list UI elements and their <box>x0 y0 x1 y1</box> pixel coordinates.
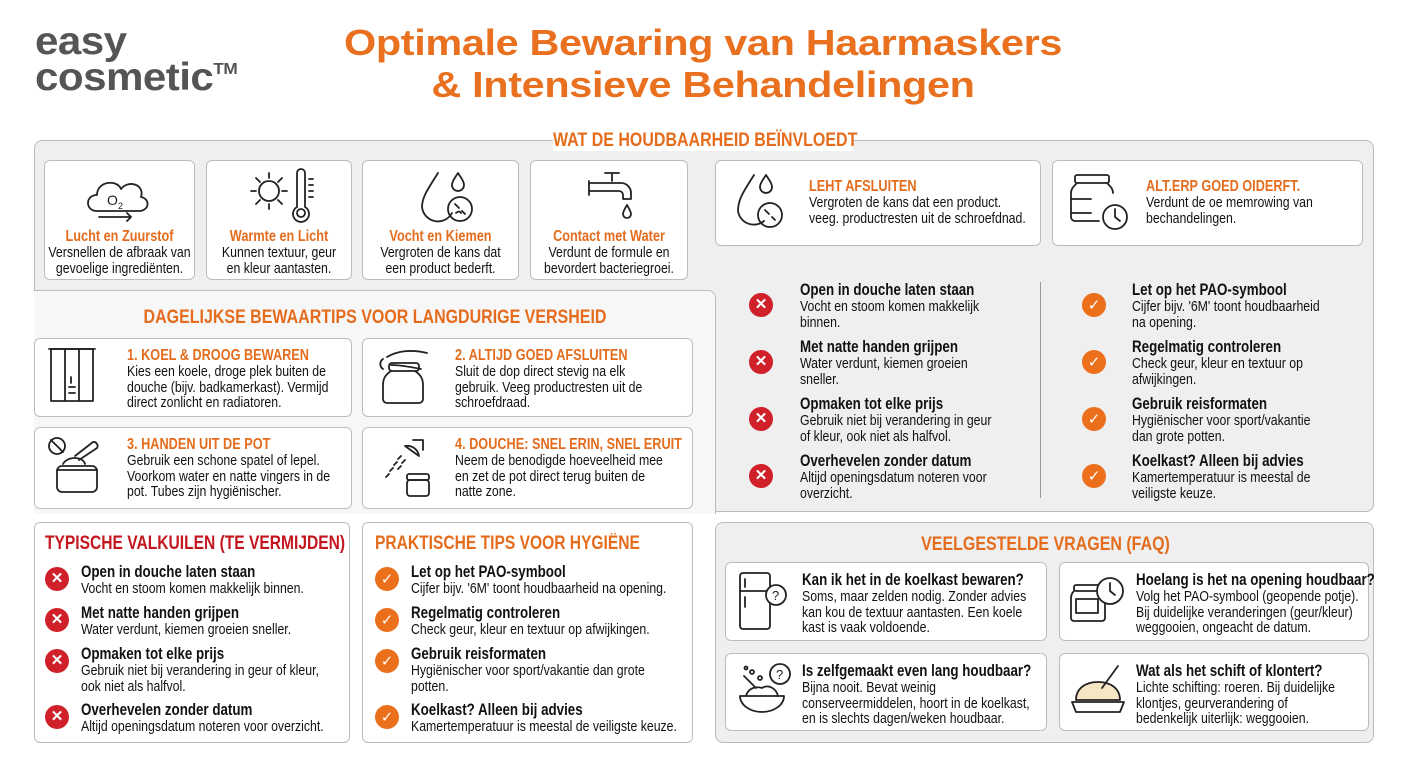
heading: valkuilen: TYPISCHE VALKUILEN (TE VERMIJDEN) <box>45 533 345 554</box>
card: schift: Wat als het schift of klontert? <box>1136 662 1322 680</box>
list: right-side tips: Kamertemperatuur is meestal de <box>1132 469 1310 486</box>
heading: wat de houdbaarheid: WAT DE HOUDBAARHEID BEÏNVLOEDT <box>553 129 857 151</box>
card: schift: klontjes, geurverandering of <box>1136 695 1288 712</box>
card: lucht en zuurstof: Lucht en Zuurstof <box>65 228 174 245</box>
icon: jar spatula <box>48 437 98 493</box>
card: lucht en zuurstof <box>44 160 195 280</box>
card: contact met water <box>530 160 688 280</box>
panel: typische valkuilen: ✕ <box>51 611 63 628</box>
card: zelfgemaakt <box>725 653 1047 731</box>
heading: dagelijkse: DAGELIJKSE BEWAARTIPS VOOR LANGDURIGE VERSHEID <box>144 306 606 328</box>
list: right-side valkuilen: ✕ <box>755 296 767 313</box>
list: right-side valkuilen: ✕ <box>755 467 767 484</box>
card: douche <box>362 427 693 509</box>
card: koelkast: kan kou de textuur aantasten. Een koele <box>802 604 1022 621</box>
list: right-side tips: dan grote potten. <box>1132 428 1225 445</box>
card: altijd goed afsluiten <box>362 338 693 417</box>
icon: tap <box>588 172 632 219</box>
card: lucht en zuurstof: Versnellen de afbraak van <box>48 244 191 261</box>
panel: typische valkuilen: Overhevelen zonder datum <box>81 701 252 719</box>
title: Optimale Bewaring van Haarmaskers <box>344 22 1062 63</box>
icon: shower jar <box>385 439 430 497</box>
icon: bowl: ? <box>776 667 783 682</box>
card: zelfgemaakt: conserveermiddelen, hoort in de koelkast, <box>802 695 1030 712</box>
card: koel en droog: 1. KOEL & DROOG BEWAREN <box>127 347 309 364</box>
card: altijd goed afsluiten: Sluit de dop direct stevig na elk <box>455 363 625 380</box>
list: right-side tips: na opening. <box>1132 314 1196 331</box>
card: schift <box>1059 653 1369 731</box>
card: handen uit de pot: Gebruik een schone spatel of lepel. <box>127 452 320 469</box>
card: koel en droog: direct zonlicht en radiatoren. <box>127 394 282 411</box>
list: right-side valkuilen: Overhevelen zonder datum <box>800 452 971 470</box>
card: koelkast: Soms, maar zelden nodig. Zonder advies <box>802 588 1026 605</box>
panel: typische valkuilen: ook niet als halfvol. <box>81 678 186 695</box>
list: right-side tips: Hygiënischer voor sport/vakantie <box>1132 412 1310 429</box>
icon: fridge <box>739 572 787 630</box>
panel: typische valkuilen: Gebruik niet bij verandering in geur of kleur, <box>81 662 319 679</box>
logo: easy <box>35 20 127 63</box>
panel: typische valkuilen: Met natte handen grijpen <box>81 604 239 622</box>
card: lucht en zuurstof: gevoelige ingrediënten. <box>56 260 183 277</box>
icon: hand jar <box>379 350 428 404</box>
panel: praktische tips: Hygiënischer voor sport/vakantie dan grote <box>411 662 645 679</box>
card: douche: en zet de pot direct terug buiten de <box>455 468 645 485</box>
card: zelfgemaakt: Is zelfgemaakt even lang houdbaar? <box>802 662 1031 680</box>
panel: wat de houdbaarheid beinvloedt <box>34 140 1374 512</box>
panel: praktische tips: Check geur, kleur en textuur op afwijkingen. <box>411 621 650 638</box>
heading: hygiene: PRAKTISCHE TIPS VOOR HYGIËNE <box>375 533 640 554</box>
list: right-side valkuilen <box>749 281 992 502</box>
card: douche: 4. DOUCHE: SNEL ERIN, SNEL ERUIT <box>455 436 682 453</box>
list: right-side valkuilen: Met natte handen grijpen <box>800 338 958 356</box>
icon: bowl <box>739 663 791 713</box>
list: right-side valkuilen: sneller. <box>800 371 839 388</box>
icon: cream bowl <box>1071 665 1125 713</box>
card: contact met water: Contact met Water <box>553 228 665 245</box>
panel: praktische tips: Let op het PAO-symbool <box>411 563 566 581</box>
panel: typische valkuilen: ✕ <box>51 652 63 669</box>
card: hoelang: Bij duidelijke veranderingen (geur/kleur) <box>1136 604 1353 621</box>
card: altijd goed afsluiten: schroefdraad. <box>455 394 530 411</box>
logo: cosmeticTM <box>35 56 237 99</box>
card: handen uit de pot: 3. HANDEN UIT DE POT <box>127 436 270 453</box>
card: schift: bedenkelijk uiterlijk: weggooien. <box>1136 710 1309 727</box>
panel: praktische tips <box>362 522 693 743</box>
panel: typische valkuilen <box>34 522 350 743</box>
list: right-side valkuilen: Gebruik niet bij verandering in geur <box>800 412 991 429</box>
card: hoelang: weggooien, ongeacht de datum. <box>1136 619 1311 636</box>
heading: FAQ: VEELGESTELDE VRAGEN (FAQ) <box>921 533 1170 555</box>
list: right-side tips: ✓ <box>1088 353 1100 371</box>
list: right-side tips: ✓ <box>1088 296 1100 314</box>
list: right-side valkuilen: overzicht. <box>800 485 853 502</box>
list: right-side tips: afwijkingen. <box>1132 371 1196 388</box>
card: koelkast <box>725 562 1047 641</box>
card: warmte en licht: Warmte en Licht <box>230 228 328 245</box>
list: right-side valkuilen: ✕ <box>755 353 767 370</box>
panel: typische valkuilen: Vocht en stoom komen makkelijk binnen. <box>81 580 304 597</box>
card: vocht en kiemen: Vergroten de kans dat <box>380 244 501 261</box>
panel: FAQ <box>715 522 1374 743</box>
list: right-side tips: Gebruik reisformaten <box>1132 395 1267 413</box>
panel: praktische tips: potten. <box>411 678 449 695</box>
icon: drops germs <box>421 172 473 222</box>
panel: praktische tips: ✓ <box>381 708 393 726</box>
card: handen uit de pot: Voorkom water en natte vingers in de <box>127 468 330 485</box>
list: right-side tips: Cijfer bijv. '6M' toont houdbaarheid <box>1132 298 1320 315</box>
icon: jar clock <box>1070 577 1124 622</box>
list: right-side valkuilen: binnen. <box>800 314 840 331</box>
icon: cloud O2: 2 <box>118 201 123 211</box>
card: koel en droog: Kies een koele, droge plek buiten de <box>127 363 326 380</box>
card: altijd goed: Verdunt de oe memrowing van <box>1146 194 1313 211</box>
card: koelkast: kast is vaak voldoende. <box>802 619 930 636</box>
card: koelkast: Kan ik het in de koelkast bewaren? <box>802 571 1024 589</box>
card: koel en droog <box>34 338 352 417</box>
panel: dagelijkse bewaartips <box>34 290 716 514</box>
panel: praktische tips: Kamertemperatuur is meestal de veiligste keuze. <box>411 718 677 735</box>
list: right-side valkuilen: Opmaken tot elke prijs <box>800 395 943 413</box>
panel: typische valkuilen: ✕ <box>51 708 63 725</box>
card: vocht en kiemen: Vocht en Kiemen <box>389 228 492 245</box>
logo <box>35 20 237 99</box>
icon: jar clock <box>1070 174 1128 230</box>
card: warmte en licht: en kleur aantasten. <box>227 260 331 277</box>
list: right-side valkuilen: of kleur, ook niet als halfvol. <box>800 428 951 445</box>
card: vocht en kiemen: een product bederft. <box>385 260 496 277</box>
icon: cabinet <box>48 348 96 402</box>
list: right-side tips: Let op het PAO-symbool <box>1132 281 1287 299</box>
list: right-side tips: veiligste keuze. <box>1132 485 1216 502</box>
card: leht afsluiten: Vergroten de kans dat een product. <box>809 194 1001 211</box>
card: altijd goed <box>1052 160 1363 246</box>
panel: praktische tips: ✓ <box>381 611 393 629</box>
card: altijd goed: bechandelingen. <box>1146 210 1236 227</box>
title: & Intensieve Behandelingen <box>431 64 975 105</box>
card: leht afsluiten: veeg. productresten uit de schroefdnad. <box>809 210 1026 227</box>
icon: sun thermometer <box>250 168 314 223</box>
card: handen uit de pot: pot. Tubes zijn hygiënischer. <box>127 483 282 500</box>
panel: praktische tips: Gebruik reisformaten <box>411 645 546 663</box>
panel: typische valkuilen: Opmaken tot elke prijs <box>81 645 224 663</box>
panel: praktische tips: Regelmatig controleren <box>411 604 560 622</box>
card: douche: natte zone. <box>455 483 516 500</box>
icon: fridge: ? <box>772 588 779 603</box>
card: vocht en kiemen <box>362 160 519 280</box>
list: right-side tips: ✓ <box>1088 410 1100 428</box>
panel: typische valkuilen: ✕ <box>51 570 63 587</box>
list: right-side tips: Check geur, kleur en textuur op <box>1132 355 1303 372</box>
card: contact met water: Verdunt de formule en <box>548 244 670 261</box>
card: hoelang: Volg het PAO-symbool (geopende potje). <box>1136 588 1359 605</box>
card: douche: Neem de benodigde hoeveelheid mee <box>455 452 663 469</box>
card: leht afsluiten <box>715 160 1041 246</box>
card: zelfgemaakt: Bijna nooit. Bevat weinig <box>802 679 936 696</box>
panel: typische valkuilen: Altijd openingsdatum noteren voor overzicht. <box>81 718 324 735</box>
panel: praktische tips: Koelkast? Alleen bij advies <box>411 701 583 719</box>
card: leht afsluiten: LEHT AFSLUITEN <box>809 178 917 195</box>
panel: typische valkuilen: Open in douche laten staan <box>81 563 255 581</box>
list: right-side tips: Regelmatig controleren <box>1132 338 1281 356</box>
card: zelfgemaakt: en is slechts dagen/weken houdbaar. <box>802 710 1004 727</box>
card: altijd goed afsluiten: gebruik. Veeg productresten uit de <box>455 379 642 396</box>
icon: cloud O2 <box>87 182 148 222</box>
card: warmte en licht <box>206 160 352 280</box>
icon: drops <box>737 174 783 228</box>
card: contact met water: bevordert bacteriegroei. <box>544 260 674 277</box>
list: right-side tips: ✓ <box>1088 467 1100 485</box>
list: right-side valkuilen: Vocht en stoom komen makkelijk <box>800 298 979 315</box>
panel: praktische tips: ✓ <box>381 570 393 588</box>
card: handen uit de pot <box>34 427 352 509</box>
icon: cloud O2: O <box>107 192 118 208</box>
card: altijd goed: ALT.ERP GOED OIDERFT. <box>1146 178 1300 195</box>
list: right-side valkuilen: ✕ <box>755 410 767 427</box>
panel: praktische tips: ✓ <box>381 652 393 670</box>
card: hoelang: Hoelang is het na opening houdbaar? <box>1136 571 1375 589</box>
card: hoelang <box>1059 562 1369 641</box>
panel: praktische tips: Cijfer bijv. '6M' toont houdbaarheid na opening. <box>411 580 666 597</box>
list: right-side valkuilen: Open in douche laten staan <box>800 281 974 299</box>
card: schift: Lichte schifting: roeren. Bij duidelijke <box>1136 679 1335 696</box>
card: warmte en licht: Kunnen textuur, geur <box>222 244 336 261</box>
title <box>344 22 1062 105</box>
list: right-side valkuilen: Altijd openingsdatum noteren voor <box>800 469 987 486</box>
panel: typische valkuilen: Water verdunt, kiemen groeien sneller. <box>81 621 291 638</box>
card: koel en droog: douche (bijv. badkamerkast). Vermijd <box>127 379 328 396</box>
card: altijd goed afsluiten: 2. ALTIJD GOED AFSLUITEN <box>455 347 628 364</box>
list: right-side tips <box>1082 281 1320 502</box>
list: right-side valkuilen: Water verdunt, kiemen groeien <box>800 355 968 372</box>
list: right-side tips: Koelkast? Alleen bij advies <box>1132 452 1304 470</box>
